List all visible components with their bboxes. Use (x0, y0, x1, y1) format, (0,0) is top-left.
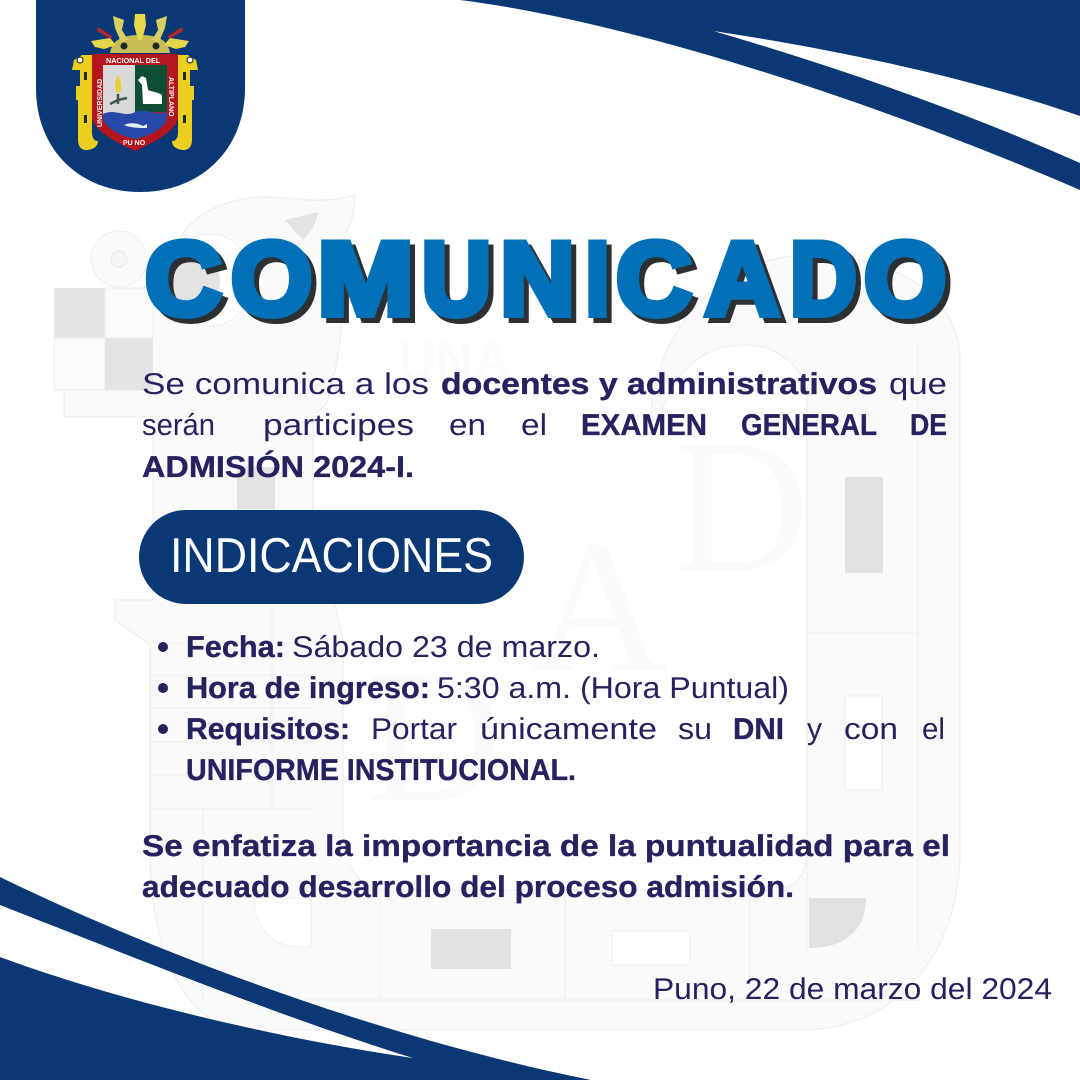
bullet list: Requisitos: (186, 713, 350, 746)
icon: university crest (72, 14, 198, 151)
date and place: Puno, 22 de marzo del 2024 (653, 973, 1052, 1006)
intro paragraph: ADMISIÓN 2024-I. (142, 450, 414, 484)
title shadow: O (236, 226, 317, 342)
emphasis paragraph: Se enfatiza la importancia de la puntualidad para el (142, 830, 950, 863)
intro paragraph: que (889, 368, 947, 401)
intro paragraph (142, 368, 947, 484)
intro paragraph: en (449, 409, 486, 442)
bullet list: Hora de ingreso: (186, 672, 430, 705)
intro paragraph: GENERAL (741, 409, 877, 442)
bottom left wave (0, 877, 591, 1080)
title shadow: I (590, 226, 614, 342)
icon: university crest: NACIONAL DEL (106, 56, 161, 65)
title face: M (317, 222, 414, 338)
bullet list: Sábado 23 de marzo. (292, 631, 600, 664)
intro paragraph: DE (910, 409, 947, 442)
title shadow: C (150, 226, 227, 342)
intro paragraph: EXAMEN (581, 409, 707, 442)
bullet list: DNI (733, 713, 784, 746)
bullet list: UNIFORME INSTITUCIONAL. (186, 754, 576, 787)
title shadow: N (505, 226, 580, 342)
title face: C (616, 222, 692, 338)
watermark: university crest background (54, 195, 960, 1030)
title face: O (864, 222, 946, 338)
title shadow: U (427, 226, 496, 342)
pill heading: INDICACIONES: INDICACIONES (170, 529, 493, 583)
emphasis paragraph: adecuado desarrollo del proceso admisión. (142, 871, 794, 904)
bullet list: 5:30 a.m. (Hora Puntual) (437, 672, 789, 705)
bullet list: y (807, 713, 822, 746)
bullet list: Portar (371, 713, 457, 746)
icon: university crest: ALTIPLANO (167, 77, 174, 117)
title shadow: M (322, 226, 419, 342)
watermark: university crest background: D (365, 632, 502, 842)
watermark: university crest background: D (672, 402, 809, 612)
intro paragraph: Se comunica a los (142, 368, 429, 401)
bullet list: su (678, 713, 712, 746)
intro paragraph: el (521, 409, 547, 442)
watermark: university crest background: A (530, 502, 667, 712)
title shadow: A (710, 226, 784, 342)
icon: university crest: UNIVERSIDAD (97, 79, 104, 127)
icon: university crest: PU NO (123, 140, 146, 147)
intro paragraph: participes (263, 409, 414, 442)
title face: A (705, 222, 780, 338)
logo badge (36, 0, 245, 192)
title face: U (422, 222, 491, 338)
intro paragraph: docentes y administrativos (441, 368, 877, 401)
bullet list: el (922, 713, 945, 746)
intro paragraph: serán (142, 409, 215, 442)
emphasis paragraph (142, 830, 950, 904)
bullet list: Fecha: (186, 631, 285, 664)
title face: O (231, 222, 312, 338)
bullet list (158, 631, 945, 787)
title face: I (586, 222, 610, 338)
title face: D (790, 222, 857, 338)
pill heading: INDICACIONES (139, 510, 524, 604)
bullet list: con (844, 713, 898, 746)
top right wave (460, 0, 1080, 190)
title face: C (145, 222, 222, 338)
title face: N (500, 222, 575, 338)
title shadow: C (621, 226, 697, 342)
title: COMUNICADO (145, 222, 951, 342)
bullet list: únicamente (480, 713, 657, 746)
title shadow: D (795, 226, 862, 342)
title shadow: O (869, 226, 951, 342)
watermark: university crest background: UNA (398, 332, 511, 390)
